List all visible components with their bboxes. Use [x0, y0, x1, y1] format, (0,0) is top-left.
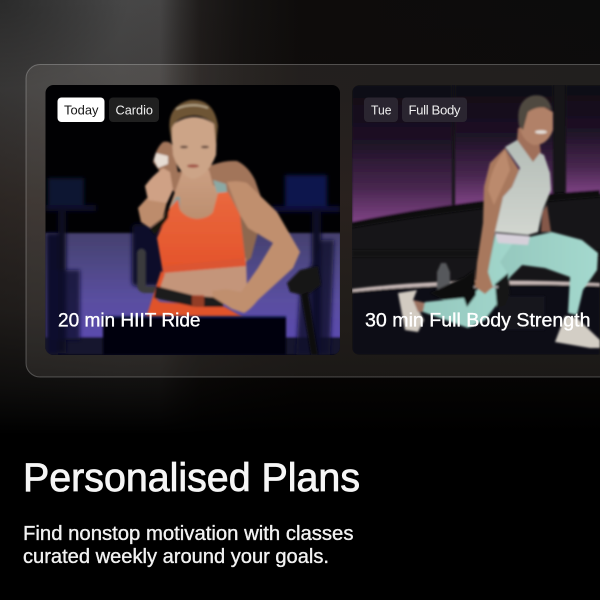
tank: [495, 140, 551, 235]
orange top: [157, 192, 246, 273]
right arm on hip: [212, 181, 300, 313]
waistband: [495, 233, 530, 245]
front leg: [500, 232, 598, 315]
tag: Full Body: [402, 98, 467, 122]
studio wall: [45, 233, 341, 355]
class title: full body strength: 30 min Full Body Strength: [365, 310, 590, 332]
belly: [160, 258, 247, 300]
panel: strength class card: [352, 85, 600, 355]
instructor: cycling: [138, 100, 300, 318]
rear arm: [541, 205, 551, 232]
panel: plan tray: [26, 64, 600, 377]
handlebar: [137, 248, 156, 293]
purple studio wall: [352, 85, 600, 355]
arm: [475, 148, 519, 294]
dumbbell: [462, 270, 478, 308]
rear leg: [422, 234, 514, 330]
instructor: strength: [398, 95, 600, 348]
background bikes: [46, 175, 340, 355]
tag: Cardio: [109, 98, 159, 122]
console: [103, 266, 321, 355]
tag: Today: Today: [64, 102, 99, 117]
front shoe: [555, 316, 600, 348]
description text: Find nonstop motivation with classes: [23, 523, 354, 545]
rear shoe: [398, 290, 424, 332]
neck and chest: [168, 170, 218, 220]
class title: HIIT ride: 20 min HIIT Ride: [58, 310, 200, 332]
belt: [154, 286, 224, 307]
description text: curated weekly around your goals.: [23, 546, 329, 568]
tag: Tue: [364, 98, 398, 122]
tag: Tue: Tue: [371, 102, 392, 117]
tag: Today: [58, 98, 104, 122]
bottle: [437, 263, 450, 294]
heading: Personalised Plans: [23, 456, 360, 500]
eyes and mouth: [180, 146, 188, 148]
neck: [517, 128, 541, 165]
equipment: [431, 278, 476, 302]
pointing arm: [138, 198, 167, 228]
tag: Cardio: Cardio: [116, 102, 153, 117]
hair: [169, 100, 218, 145]
description text: [23, 523, 354, 568]
rear raised arm: [153, 142, 262, 215]
rear ankle: [413, 300, 426, 312]
panel: cycling class card: [45, 85, 341, 355]
head: [520, 105, 553, 145]
face: [171, 117, 217, 179]
orange leggings: [146, 271, 244, 318]
tag: Full Body: Full Body: [408, 102, 461, 117]
teal straps: [171, 197, 180, 210]
rear waist: [238, 210, 258, 262]
